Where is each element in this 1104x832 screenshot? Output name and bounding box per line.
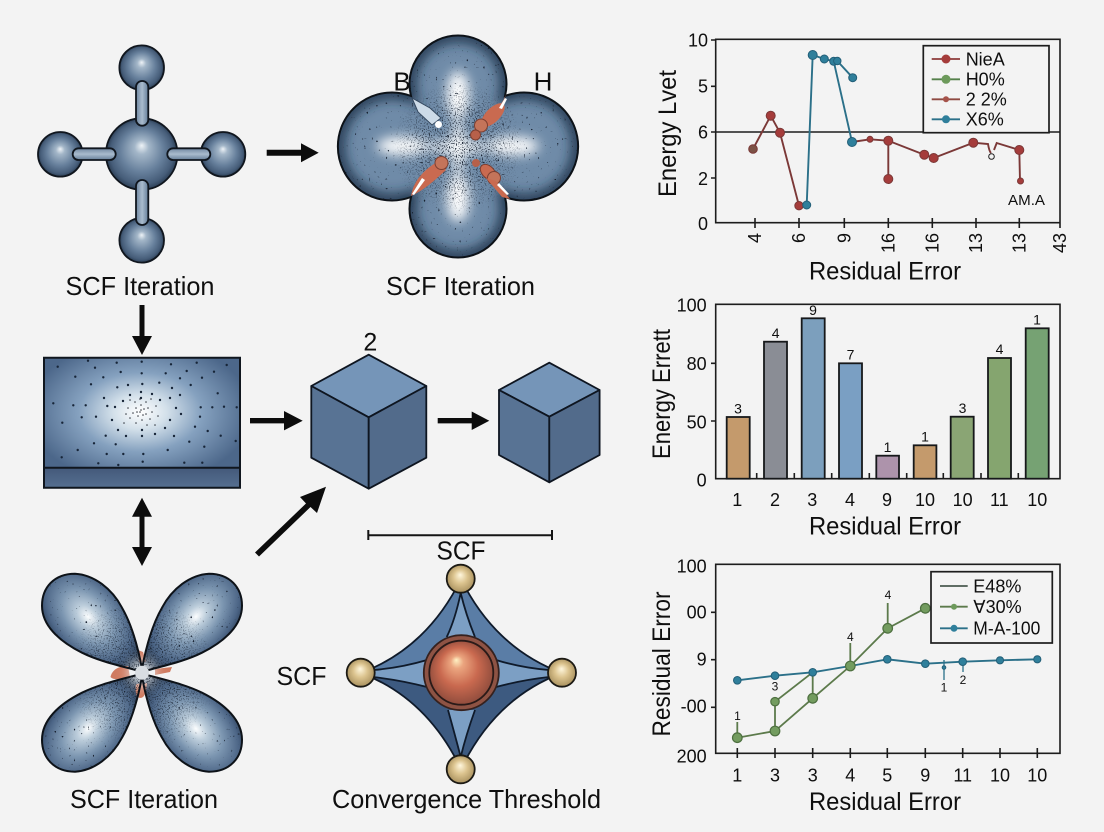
y tick labels: 10 [688, 31, 708, 51]
label: SCF Iteration under molecule: SCF Iteration [66, 271, 214, 301]
atom: left [38, 132, 83, 177]
x tick labels [732, 490, 1047, 510]
point labels: 4 [885, 588, 892, 602]
axis title x: Residual Error [809, 257, 961, 285]
speckle [45, 574, 240, 771]
legend [923, 46, 1049, 133]
star upper half [361, 579, 562, 673]
x tick labels: 10 [915, 490, 935, 510]
orbital outline [338, 36, 578, 257]
bar value labels: 1 [1033, 312, 1041, 328]
legend: H0% [966, 70, 1005, 90]
legend: ∀30% [973, 597, 1022, 617]
y tick labels: 5 [698, 77, 708, 97]
stems [944, 660, 963, 680]
orbital body [338, 36, 578, 257]
centre core covering the lobe tips [135, 666, 149, 680]
x tick labels: 10 [990, 766, 1010, 786]
y tick labels: 100 [677, 556, 707, 576]
icon: small cube [499, 363, 600, 482]
label: SCF top: SCF [436, 536, 486, 566]
label: SCF Iteration under clover: SCF Iteration [70, 784, 218, 814]
bar value labels: 3 [959, 400, 967, 416]
atom: top [119, 45, 164, 90]
axis title y: Residual Error [648, 592, 676, 736]
point labels: 1 [941, 681, 948, 695]
dense centre dots [124, 399, 158, 425]
atom: bottom [119, 218, 164, 263]
x tick labels: 2 [770, 490, 780, 510]
bracket: span marker [368, 530, 552, 540]
x tick labels [732, 766, 1047, 786]
red series line [753, 116, 1020, 206]
chart: residual error line chart [648, 556, 1060, 816]
x tick labels: 11 [990, 490, 1009, 510]
label: 2: 2 [363, 329, 377, 357]
y tick labels: -00 [681, 697, 707, 717]
blue series [737, 659, 1037, 680]
bar value labels: 4 [772, 325, 780, 341]
blue series line [807, 55, 853, 205]
slab bottom band [44, 468, 240, 488]
core sphere [424, 635, 499, 710]
x tick labels: 43 [1050, 233, 1070, 253]
arrow: slab to cube [250, 411, 303, 430]
y tick labels: 0 [698, 214, 708, 234]
y tick labels: 2 [698, 169, 708, 189]
x tick labels [745, 233, 1070, 253]
y tick labels: 100 [677, 296, 707, 316]
point labels: 1 [734, 709, 741, 723]
x tick labels: 4 [745, 233, 765, 243]
y tick labels: 9 [697, 650, 707, 670]
y tick labels: 0 [697, 471, 707, 491]
x tick labels: 5 [882, 766, 892, 786]
y tick labels: 80 [687, 354, 707, 374]
point labels: 4 [847, 630, 854, 644]
x tick labels: 11 [953, 766, 972, 786]
green series [737, 603, 925, 738]
arrow: down to density panel [132, 305, 152, 355]
x tick labels: 6 [789, 233, 809, 243]
legend: NieA [966, 50, 1005, 70]
x tick labels: 4 [845, 766, 855, 786]
red pods and pale pod between lobes [411, 90, 510, 199]
atom: centre [106, 118, 177, 190]
atom: right [201, 132, 245, 177]
red core wedges [110, 650, 172, 698]
y tick labels: 6 [698, 123, 708, 143]
bar value labels: 1 [884, 439, 892, 455]
frame and ticks [711, 564, 1060, 758]
gold atoms [347, 565, 576, 783]
x tick labels: 16 [878, 233, 898, 253]
red markers [749, 111, 1024, 210]
icon: large cube [311, 355, 426, 489]
legend: X6% [966, 110, 1004, 130]
label: SCF Iteration under orbital: SCF Iteration [386, 271, 535, 301]
bonds [73, 81, 210, 225]
label: B: B [393, 66, 411, 96]
legend [931, 572, 1052, 643]
bar value labels: 3 [734, 400, 742, 416]
legend: M-A-100 [973, 618, 1040, 638]
axis title y: Energy Lvet [654, 70, 682, 197]
frame and ticks [711, 39, 1060, 228]
chart: energy level line chart [654, 31, 1070, 285]
label: Convergence Threshold: Convergence Threshold [332, 784, 601, 814]
legend: E48% [973, 576, 1021, 596]
x tick labels: 10 [1027, 490, 1047, 510]
bar value labels: 1 [921, 428, 929, 444]
axis title x: Residual Error [809, 788, 961, 816]
star lines [361, 579, 562, 769]
density dots [53, 361, 237, 465]
orbital: four-lobe density [335, 32, 585, 262]
bar value labels: 9 [809, 302, 817, 318]
x tick labels: 13 [966, 233, 986, 253]
lobe shading and highlights [335, 32, 585, 262]
blue markers [734, 656, 1041, 684]
axis title y: Energy Errett [648, 329, 676, 459]
lobes [42, 574, 242, 772]
slab outlines [44, 358, 240, 488]
blue markers [803, 50, 857, 209]
green markers [732, 604, 930, 742]
x tick labels: 9 [882, 490, 892, 510]
y tick labels [688, 31, 708, 234]
y tick labels: 200 [677, 746, 707, 766]
orbital: diagonal four-lobe clover [38, 570, 246, 775]
x tick labels: 10 [1027, 766, 1047, 786]
bar value labels: 7 [847, 346, 855, 362]
y tick labels [677, 296, 707, 491]
x tick labels: 3 [808, 766, 818, 786]
chart: energy bar chart [648, 296, 1060, 540]
x tick labels: 3 [770, 766, 780, 786]
x tick labels: 9 [920, 766, 930, 786]
x tick labels: 13 [1009, 233, 1029, 253]
point labels [734, 588, 967, 723]
inner highlights [373, 593, 549, 757]
y tick labels: 00 [687, 602, 707, 622]
bars [727, 318, 1049, 479]
x tick labels: 9 [834, 233, 854, 243]
slab face [44, 358, 240, 468]
legend: 2 2% [966, 90, 1007, 110]
bar value labels: 4 [996, 341, 1004, 357]
lobe outlines [42, 574, 242, 772]
y tick labels: 50 [687, 412, 707, 432]
x tick labels: 16 [922, 233, 942, 253]
x tick labels: 4 [845, 490, 855, 510]
label: SCF left: SCF [276, 661, 326, 691]
x tick labels: 10 [953, 490, 973, 510]
label: H: H [534, 66, 552, 96]
frame and ticks [711, 304, 1060, 479]
arrow: molecule to orbital [267, 143, 319, 162]
x tick labels: 1 [732, 766, 742, 786]
y tick labels [677, 556, 707, 766]
annotation: AM.A [1008, 192, 1045, 209]
centre glow [129, 660, 155, 686]
point labels: 3 [772, 680, 779, 694]
molecule: central atom with four bonded atoms [38, 45, 245, 263]
axis title x: Residual Error [809, 512, 961, 540]
bar value labels [734, 302, 1041, 455]
panel: density slab [44, 358, 240, 488]
arrow: diagonal to cube [255, 487, 326, 556]
arrow: double headed between slab and lobes [132, 498, 152, 566]
icon: star-shaped coordination complex [347, 565, 576, 783]
x tick labels: 1 [732, 490, 742, 510]
star lower half [361, 673, 562, 769]
point labels: 2 [960, 673, 967, 687]
x tick labels: 3 [807, 490, 817, 510]
arrow: cube to small cube [438, 412, 489, 430]
